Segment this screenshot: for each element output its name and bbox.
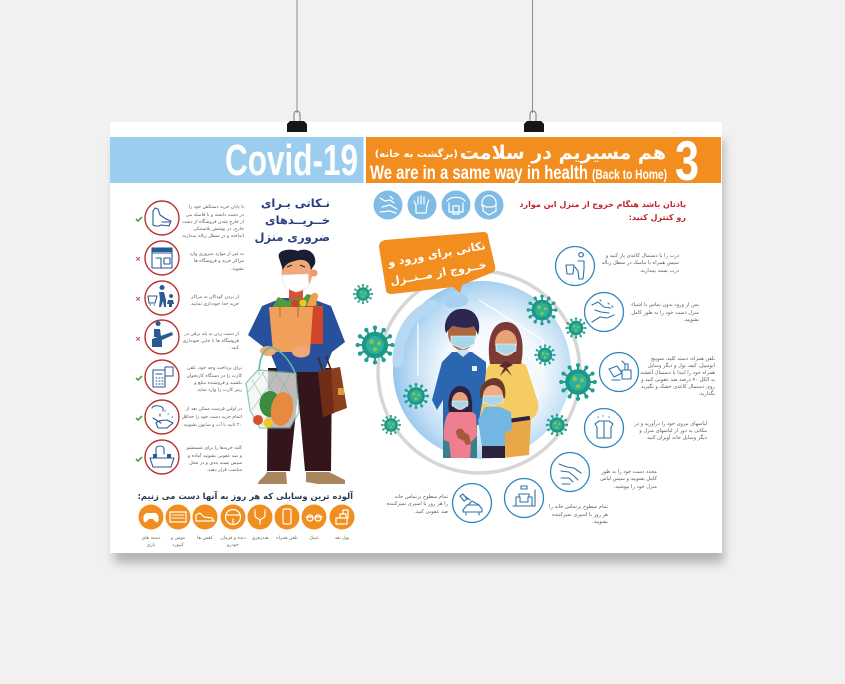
persian title: هم مسیریم در سلامت: [460, 142, 666, 164]
red reminder text: رو کنترل کنید:: [629, 213, 686, 222]
shopping tip 4: کنید.: [230, 345, 240, 351]
eyes and eyebrows: [287, 265, 305, 267]
home tip 1: discard gloves: درب را با دستمال کاغذی باز کنید و: [605, 253, 679, 259]
shoes: [258, 472, 345, 484]
shopping tip 7: کلیه خریدها را برای شستشو: [186, 445, 243, 451]
home tip 3: disinfect belongings: تلفن همراه، دسته کلید، سوییچ: [651, 356, 716, 362]
shopping tip 2: [135, 241, 244, 275]
prevention icon: face shield: [442, 190, 470, 220]
home tip 1: discard gloves: [556, 246, 679, 286]
shopping tip 6: [136, 400, 242, 434]
home tip 1: discard gloves: سپس همراه با ماسک در سطل زباله: [602, 259, 679, 266]
home tip 5: wash hands again: منزل خود را بپوشید.: [614, 484, 657, 490]
shopping tip 4: فروشگاه ها تا جایی خودداری: [183, 337, 239, 344]
shopping tip 4: از دست زدن به پله برقی در: [184, 331, 239, 337]
home tip 3: disinfect belongings: به الکل ۷۰ درصد ضد عفونی کنید و: [640, 377, 715, 383]
home tip 6: clean surfaces: بشویید.: [592, 519, 608, 525]
heading: shopping tips: خــریــدهای: [265, 213, 330, 227]
shopping tip 3: خرید جدا خودداری نمایید.: [190, 301, 239, 307]
home tip 2: wash hands: [584, 292, 700, 332]
home tip 4: hang clothes: دیگر وسایل خانه آویزان کنید.: [646, 434, 707, 441]
prevention icon: gloves: [408, 190, 436, 220]
item: shoes: [192, 504, 218, 541]
english title: We are in a same way in health: [370, 163, 588, 184]
home tip 4: hang clothes: لباسهای بیرون خود را درآورید و در: [633, 420, 707, 427]
hanging string left: [296, 0, 298, 113]
mother hair: [489, 322, 523, 364]
girl body: [444, 409, 477, 458]
home tip 6: clean surfaces: هر روز با اسپری تمیزکننده: [552, 512, 608, 518]
item: mobile phone: [274, 504, 300, 541]
item: cash: پول نقد: [335, 536, 350, 541]
hanging string right: [532, 0, 534, 113]
home tip 3: disinfect belongings: اتومبیل، کیف پول و دیگر وسایل: [648, 362, 715, 369]
shopping tip 7: مناسب قرار دهید.: [207, 467, 242, 473]
home tip 2: wash hands: منزل دست خود را به طور کامل: [631, 310, 699, 316]
shopping tip 7: و ضد عفونی بشویید آماده و: [187, 453, 242, 459]
shopping tip 5: کارت را در دستگاه کارتخوان: [186, 372, 243, 379]
home tip 3: disinfect belongings: بگذارید.: [698, 390, 715, 397]
speech bubble: home entry and exit tips: نکاتی برای ورود و: [386, 239, 487, 269]
shopping tip 2: ×: [135, 255, 141, 263]
home tip 6: clean surfaces: تمام سطوح پرتماس خانه را: [549, 504, 609, 510]
home tip 4: hang clothes: مکانی به دور از لباسهای منزل و: [638, 428, 707, 434]
hands: [292, 346, 310, 358]
item: earphones: [248, 504, 272, 541]
shopping tip 5: [136, 360, 243, 394]
house outline: [418, 300, 543, 376]
father trousers: [443, 420, 477, 458]
illustration: man with shopping bags: [246, 250, 347, 484]
shopping tip 3: از بردن کودکان به مراکز: [190, 294, 239, 300]
boy head: [480, 378, 505, 398]
illustration: family in protective globe: [378, 271, 580, 473]
home tip 2: wash hands: بشویید.: [683, 317, 699, 323]
squash: [268, 390, 296, 428]
item: earphones: هندزفری: [252, 536, 269, 541]
item: mouse and keyboard: موس و: [170, 536, 186, 541]
red reminder text: [519, 199, 686, 222]
speech bubble: home entry and exit tips: [379, 232, 495, 294]
globe highlights: [398, 305, 432, 362]
home tip 4: hang clothes: [584, 408, 707, 448]
heading: shopping tips: نـکاتی بـرای: [261, 196, 330, 210]
home tip 5: wash hands again: مجدد دست خود را به طور: [600, 469, 657, 475]
home tip 7: disinfect surfaces: را هر روز با اسپری تمیزکننده: [387, 501, 449, 507]
shopping tip 1: خارج، در پوشش پلاستیکی: [193, 226, 244, 232]
item: steering wheel: دنده و فرمان: [220, 536, 246, 541]
home tip 7: disinfect surfaces: ضد عفونی کنید.: [414, 509, 448, 515]
father torso: [432, 352, 487, 425]
groceries: [272, 294, 318, 309]
home tip 7: disinfect surfaces: [387, 484, 492, 522]
father head: [448, 316, 476, 350]
item: steering wheel: [220, 504, 246, 548]
melon: [260, 391, 280, 417]
shopping tip 7: [136, 440, 243, 474]
english subtitle: (Back to Home): [592, 167, 667, 182]
item: steering wheel: خودرو: [226, 543, 239, 548]
binder clip right: [524, 111, 544, 132]
father mask: [451, 336, 475, 349]
home tip 7: disinfect surfaces: تمام سطوح پرتماس خانه: [394, 494, 449, 500]
prevention icon: mask: [474, 190, 504, 220]
shopping tip 5: برای پرداخت وجه خود، تلفن: [187, 365, 242, 371]
shopping tip 6: در اولین فرصت ممکن بعد از: [185, 406, 242, 412]
shopping tip 1: تا پایان خرید دستکش خود را: [189, 204, 245, 210]
home tip 5: wash hands again: [550, 452, 658, 492]
home tip 3: disinfect belongings: همراه خود را ابتدا با دستمال آغشته: [640, 369, 715, 376]
header band: Covid-19: Covid-19: [225, 136, 358, 185]
red paper bag: [305, 306, 323, 344]
net bag: [259, 347, 296, 375]
binder clip left: [287, 111, 307, 132]
header band: Covid-19: [110, 136, 364, 185]
blue globe: [393, 281, 571, 459]
face mask: [282, 274, 309, 292]
shopping tip 2: به غیر از موارد ضروری وارد: [189, 251, 244, 257]
girl hair and head: [448, 386, 472, 412]
red reminder text: یادتان باشد هنگام خروج از منزل این موارد: [519, 199, 686, 209]
header band: title: [366, 129, 721, 192]
shopping tip 6: اتمام خرید دست خود را حداقل: [182, 414, 242, 420]
speech bubble: home entry and exit tips: خــروج از مــنــزل: [389, 258, 488, 289]
shopping tip 5: رمز کارت را وارد نماید.: [196, 387, 242, 393]
prevention icon: hand washing: [374, 190, 402, 220]
shopping tip 3: ×: [135, 295, 141, 303]
home tip 6: clean surfaces: [504, 478, 609, 525]
shopping tip 1: [136, 201, 245, 239]
brown satchel: [318, 356, 331, 371]
item: glasses: عینک: [309, 535, 319, 541]
home tip 2: wash hands: پس از ورود بدون تماس با اشیاء: [631, 302, 700, 308]
item: shoes: کفش ها: [197, 535, 214, 541]
item: glasses: [302, 504, 326, 541]
fruit: [253, 415, 263, 425]
home tip 1: discard gloves: درب بسته بیندازید.: [639, 268, 679, 274]
shopping tip 1: از خارج شدن فروشگاه از دست: [182, 218, 244, 225]
torso and arms: [248, 298, 345, 372]
poster shadow: [114, 140, 724, 563]
mother scarf: [499, 361, 513, 376]
orange paper bag: [269, 307, 313, 352]
item: mouse and keyboard: [166, 504, 190, 548]
item: cash: [330, 504, 354, 541]
item: game controllers: [138, 504, 164, 548]
item: mobile phone: تلفن همراه: [276, 536, 298, 541]
shopping tip 2: مراکز خرید و فروشگاه ها: [194, 257, 244, 264]
head: [282, 252, 312, 292]
shopping tip 1: انداخته و در سطل زباله بیندازید.: [181, 233, 244, 239]
trousers: [267, 368, 332, 471]
shopping tip 6: ۲۰ ثانیه با آب و صابون بشویید.: [182, 422, 242, 428]
boy body: [478, 407, 512, 447]
shopping tip 1: در دست داشته و با فاصله می: [186, 212, 244, 218]
item: game controllers: بازی: [147, 543, 155, 548]
shopping tip 4: ×: [135, 335, 141, 343]
mother face: [495, 330, 517, 356]
home tip 5: wash hands again: کامل بشویید و سپس لباس: [600, 476, 658, 482]
mother skirt: [500, 419, 531, 458]
ears: [310, 270, 318, 276]
mother body: [478, 360, 538, 450]
neck and scarf: [289, 288, 303, 300]
heading: shopping tips: ضروری منزل: [254, 230, 330, 245]
heading: most contaminated items: آلوده ترین وسایلی که هر روز به آنها دست می زنیم:: [138, 490, 354, 502]
gray ring: [378, 271, 580, 473]
home tip 3: disinfect belongings: روی دستمال کاغذی خشک و بگیرید: [641, 383, 716, 390]
heading: shopping tips: [254, 196, 330, 245]
shopping tip 2: نشوید.: [231, 267, 244, 272]
icon row: contaminated items: [138, 504, 354, 548]
hair: [279, 250, 315, 270]
shopping tip 5: بکشید و فروشنده مبلغ و: [193, 380, 242, 386]
poster sheet: [110, 122, 722, 553]
item: game controllers: دسته های: [142, 536, 160, 541]
item: mouse and keyboard: کیبورد: [172, 542, 185, 548]
teddy bear: [456, 428, 471, 445]
persian subtitle: (برگشت به خانه): [375, 147, 458, 160]
shopping tip 4: [135, 320, 240, 354]
shopping tip 7: سپس بسته بندی و در محل: [189, 460, 242, 466]
section number: 3: [675, 129, 699, 192]
virus particles: [353, 284, 597, 436]
mother mask: [496, 344, 516, 355]
home tip 3: disinfect belongings: [600, 352, 716, 397]
shopping tip 3: [135, 281, 239, 315]
